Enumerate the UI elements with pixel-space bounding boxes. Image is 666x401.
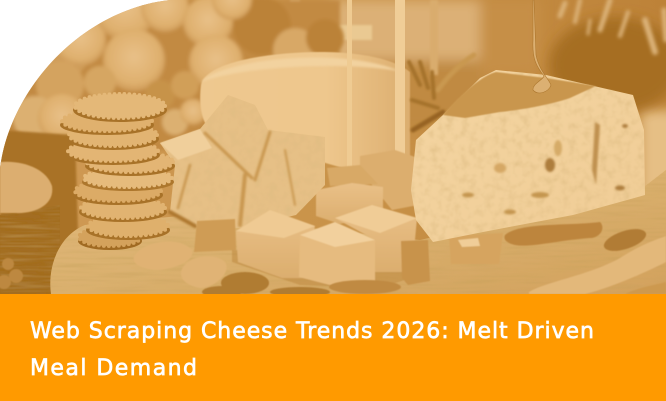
cheese cubes — [194, 205, 503, 288]
rosemary sprig — [409, 55, 474, 130]
background wash — [0, 0, 666, 240]
front cube — [299, 240, 376, 286]
top crackers — [60, 94, 167, 150]
breadstick bottom right — [529, 225, 666, 294]
honey stream — [533, 0, 551, 93]
title banner — [0, 294, 666, 401]
right cube — [338, 218, 418, 272]
cubes behind wedge — [316, 150, 418, 224]
flat cube — [450, 234, 502, 261]
dark plant top right — [549, 0, 666, 113]
cracker stack — [60, 94, 175, 250]
cube shadow on board — [232, 250, 404, 286]
blue veins — [462, 122, 628, 214]
biscuits and nuts — [134, 241, 401, 298]
wooden board — [50, 170, 666, 294]
sausage garnish — [504, 222, 602, 246]
skewers — [347, 0, 405, 168]
wheel of cheese — [200, 52, 410, 170]
crumbly cheese chunk — [160, 95, 325, 228]
small cube — [194, 219, 236, 252]
slim cube — [401, 240, 430, 285]
middle crackers — [66, 141, 175, 191]
blurred room background — [336, 0, 666, 186]
honey pool — [443, 72, 596, 118]
photo: cheese board with orange duotone — [0, 0, 666, 298]
bottom crackers — [73, 181, 170, 250]
window frame highlights — [290, 0, 438, 75]
dark table, left — [0, 130, 80, 294]
title text line 2: Meal Demand — [30, 356, 197, 381]
grapes — [0, 0, 344, 150]
blue cheese wedge — [411, 0, 645, 242]
large cube left — [236, 226, 316, 278]
title text line 1: Web Scraping Cheese Trends 2026: Melt Driven — [30, 319, 594, 344]
